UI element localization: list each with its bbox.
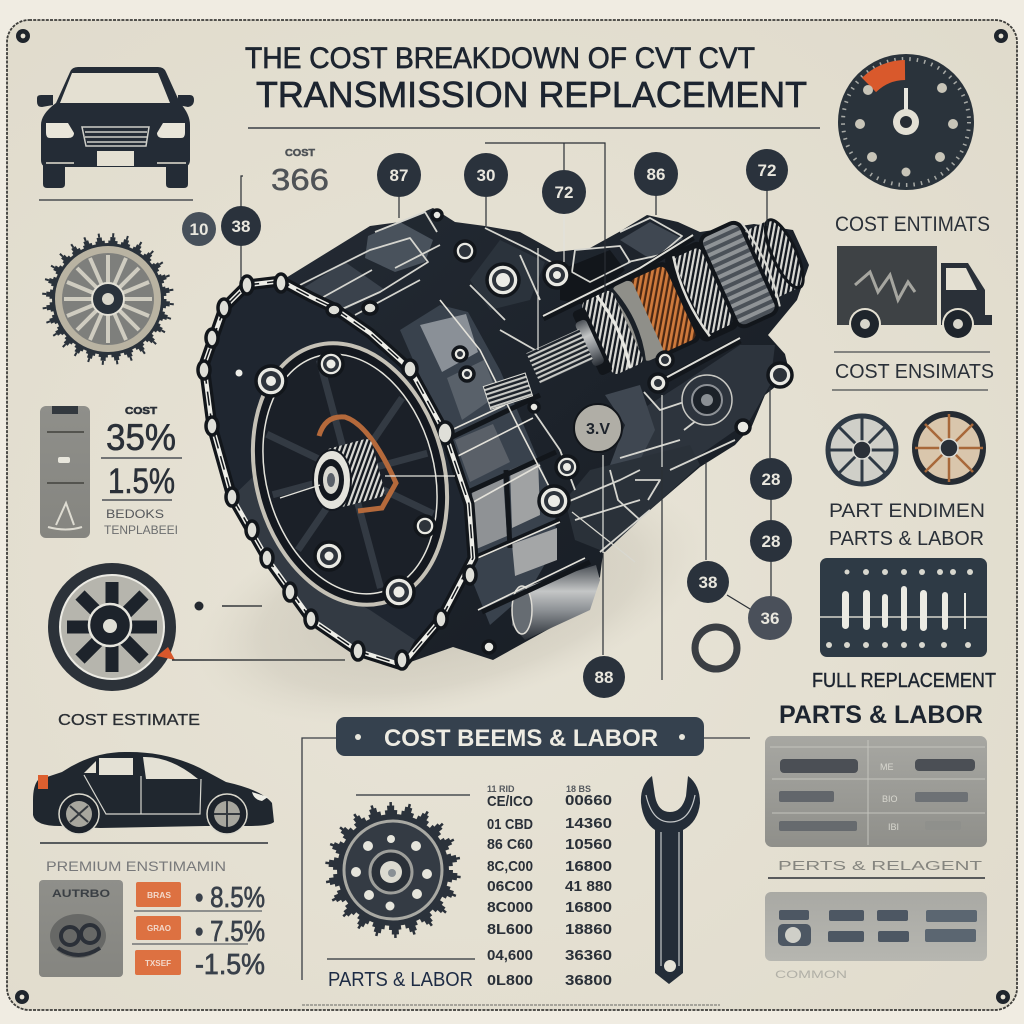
housing silhouette xyxy=(281,208,809,665)
percent rows xyxy=(132,882,265,981)
truck rules xyxy=(832,352,990,390)
part card xyxy=(40,406,90,538)
panel: parts table: ME xyxy=(880,762,894,772)
label: part dimension: PART ENDIMEN xyxy=(829,501,985,522)
bolts xyxy=(256,210,792,653)
gear straps xyxy=(543,235,740,384)
panel: cost and labor xyxy=(302,717,750,991)
percent rows: • 7.5% xyxy=(195,916,265,948)
cost columns: 8C000 xyxy=(487,899,533,916)
cost columns: 36360 xyxy=(565,947,612,964)
panel: cost percentages xyxy=(40,406,182,538)
callout badges: 88 xyxy=(595,668,613,687)
flange chain outline xyxy=(204,281,473,665)
orange tags: BRAS xyxy=(147,891,172,900)
caption and rules: TENPLABEEI xyxy=(104,523,178,537)
cost columns: CE/ICO xyxy=(487,793,533,810)
percentage text: COST xyxy=(125,406,157,417)
cost columns: 36800 xyxy=(565,972,612,989)
label: cost estimate 1: COST ENTIMATS xyxy=(835,213,990,236)
part photo card xyxy=(39,880,123,977)
icon: wheel right xyxy=(915,414,983,482)
cost columns: 41 880 xyxy=(565,878,612,895)
cost columns: 04,600 xyxy=(487,947,533,964)
small stat: 366: COST xyxy=(285,148,315,159)
rule under car xyxy=(39,199,193,201)
icon: wrench xyxy=(641,776,700,984)
cost columns: 00660 xyxy=(565,792,612,809)
label: parts and labor small: PARTS & LABOR xyxy=(829,528,984,550)
percentage text: 35% xyxy=(106,417,176,458)
orange tags: TXSEF xyxy=(145,959,171,968)
icon: gauge xyxy=(838,54,974,190)
cost columns: 18860 xyxy=(565,921,612,938)
label: parts replacement: PERTS & RELAGENT xyxy=(778,858,982,873)
label: full replacement: FULL REPLACEMENT xyxy=(812,670,996,692)
icon: gear wheel xyxy=(44,235,172,363)
caption and rules xyxy=(101,458,182,537)
callout badges: 38 xyxy=(232,217,250,236)
percent rows: • 8.5% xyxy=(195,882,265,914)
cost columns: 18 BS xyxy=(566,784,591,794)
icon: car side xyxy=(33,752,274,834)
percentage text xyxy=(106,406,176,501)
callout badges: 86 xyxy=(647,165,665,184)
transmission shadow xyxy=(171,430,729,770)
heading: parts and labor: PARTS & LABOR xyxy=(779,701,983,729)
badge: CVT hub xyxy=(574,404,622,452)
cost columns: 14360 xyxy=(565,815,612,832)
connector lines xyxy=(241,143,771,680)
callout badges: 10 xyxy=(190,220,208,239)
cost columns: 0L800 xyxy=(487,972,533,989)
title: THE COST BREAKDOWN OF CVT CVT xyxy=(245,42,755,75)
cost columns: 10560 xyxy=(565,836,612,853)
icon: sprocket xyxy=(327,795,470,936)
small stat: 366: 366 xyxy=(271,162,329,197)
panel: common table xyxy=(765,892,987,961)
title rule xyxy=(248,127,820,129)
cost columns: 16800 xyxy=(565,899,612,916)
output shaft gears xyxy=(513,203,816,414)
small stat: 366 xyxy=(271,148,329,197)
icon: truck xyxy=(837,246,992,340)
caption and rules: BEDOKS xyxy=(106,507,164,521)
pill heading: COST BEEMS & LABOR xyxy=(384,725,658,752)
bottom rule xyxy=(302,1004,720,1006)
transmission illustration xyxy=(198,203,816,669)
cost columns: 86 C60 xyxy=(487,836,533,853)
callout badges: 87 xyxy=(390,166,408,185)
orange tags xyxy=(135,882,181,975)
concentric boss xyxy=(682,375,732,425)
top ribs and castings xyxy=(300,212,775,552)
cost columns: 8L600 xyxy=(487,921,533,938)
panel: parts table: IBI xyxy=(888,822,899,832)
percent rows: -1.5% xyxy=(195,949,265,981)
flange scallops xyxy=(198,274,476,669)
icon: tire xyxy=(48,563,176,691)
rule and label: parts and labor: PARTS & LABOR xyxy=(328,969,473,991)
panel: bars chart xyxy=(820,558,987,657)
cost columns: 16800 xyxy=(565,858,612,875)
percentage text: 1.5% xyxy=(108,462,175,501)
short input shaft xyxy=(483,373,533,409)
label: cost estimate 2: COST ENSIMATS xyxy=(835,361,994,383)
cost columns: 11 RID xyxy=(487,784,515,794)
orange tags: GRAO xyxy=(147,924,171,933)
icon: o-ring xyxy=(695,627,737,669)
callout badges xyxy=(182,149,792,698)
rule under side car xyxy=(40,842,268,844)
center hub xyxy=(280,417,455,511)
callout badges: 30 xyxy=(477,166,495,185)
flange lower shade xyxy=(232,470,415,665)
callout badges: 72 xyxy=(555,183,573,202)
part photo card: AUTRBO xyxy=(52,888,111,900)
pill heading xyxy=(302,717,750,980)
badge: CVT hub: 3.V xyxy=(586,421,610,438)
callout badges: 28 xyxy=(762,470,780,489)
cost columns xyxy=(487,784,612,989)
marker dot xyxy=(194,602,204,610)
dowel dot xyxy=(236,370,242,376)
housing side blocks xyxy=(400,300,600,640)
panel: parts table: BIO xyxy=(882,794,898,804)
title xyxy=(245,42,807,115)
rule xyxy=(768,877,985,879)
cost columns: 06C00 xyxy=(487,878,533,895)
label: repair estimate: PREMIUM ENSTIMAMIN xyxy=(46,858,226,874)
label: cost estimate: COST ESTIMATE xyxy=(58,712,200,729)
panel: parts table xyxy=(765,736,987,847)
title: TRANSMISSION REPLACEMENT xyxy=(256,74,807,115)
connector: tire to housing xyxy=(172,606,345,660)
icon: car front xyxy=(37,67,194,188)
callout badges: 28 xyxy=(762,532,780,551)
icon: wheel left xyxy=(828,416,896,484)
callout badges: 36 xyxy=(761,609,779,628)
label: common: COMMON xyxy=(775,969,847,981)
panel: estimate rows xyxy=(39,880,265,981)
callout badges: 72 xyxy=(758,161,776,180)
flange bore xyxy=(225,321,475,627)
callout badges: 38 xyxy=(699,573,717,592)
cost columns: 01 CBD xyxy=(487,816,533,833)
cost columns: 8C,C00 xyxy=(487,858,533,875)
